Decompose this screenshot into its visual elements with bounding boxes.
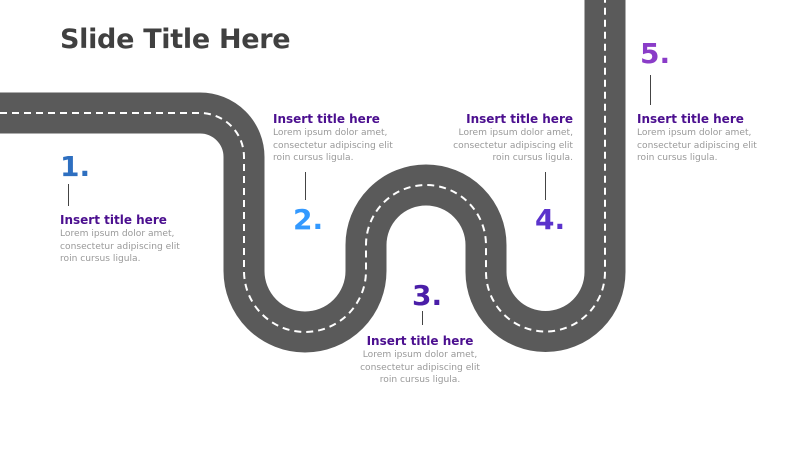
step 4: Insert title here <box>466 112 573 126</box>
step 3: Lorem ipsum dolor amet, <box>363 350 477 360</box>
step 3: Insert title here <box>367 334 473 348</box>
step 1: Insert title here <box>60 213 167 227</box>
step 4: Lorem ipsum dolor amet, <box>459 128 573 138</box>
step 2: consectetur adipiscing elit <box>273 140 393 150</box>
step 5 <box>637 37 757 163</box>
step 1: consectetur adipiscing elit <box>60 242 180 252</box>
step 4: consectetur adipiscing elit <box>453 140 573 150</box>
step 1: 1. <box>60 150 90 183</box>
step 4: roin cursus ligula. <box>492 153 573 163</box>
step 5: consectetur adipiscing elit <box>637 140 757 150</box>
step 2: roin cursus ligula. <box>273 153 354 163</box>
step 3 <box>360 279 480 385</box>
step 2: Insert title here <box>273 112 380 126</box>
step 2: Lorem ipsum dolor amet, <box>273 128 387 138</box>
title: Slide Title Here <box>60 24 290 55</box>
step 5: Lorem ipsum dolor amet, <box>637 128 751 138</box>
step 1 <box>60 150 180 264</box>
step 5: 5. <box>640 37 670 70</box>
step 2: 2. <box>293 203 323 236</box>
step 3: roin cursus ligula. <box>380 375 460 385</box>
step 5: Insert title here <box>637 112 744 126</box>
step 1: roin cursus ligula. <box>60 254 140 264</box>
step 3: consectetur adipiscing elit <box>360 362 480 372</box>
step 4: 4. <box>535 203 565 236</box>
step 4 <box>453 112 573 236</box>
step 5: roin cursus ligula. <box>637 153 718 163</box>
step 2 <box>273 112 393 236</box>
step 3: 3. <box>412 279 442 312</box>
step 1: Lorem ipsum dolor amet, <box>60 229 174 239</box>
